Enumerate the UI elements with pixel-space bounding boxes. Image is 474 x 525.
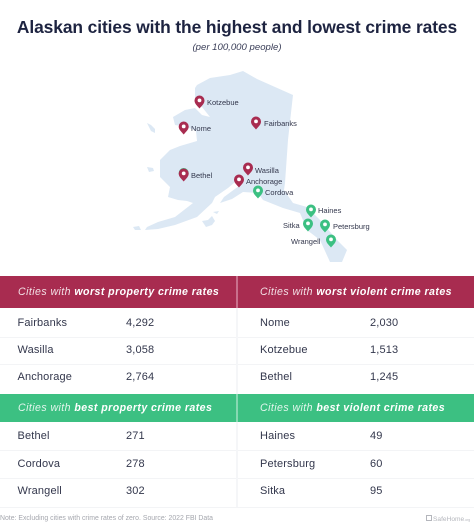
panel: worst crime rows: Nome (260, 317, 290, 329)
land (133, 71, 347, 262)
city labels (191, 98, 370, 246)
city labels: Fairbanks (264, 119, 297, 128)
panel: best crime rows: 60 (370, 458, 383, 470)
panel: best crime rows: Cordova (18, 458, 60, 470)
logo text: SafeHome.org (433, 516, 470, 523)
heading: best property: Cities with best property crime rates (18, 402, 212, 414)
city labels: Sitka (283, 221, 301, 230)
panel: best crime rows: 302 (126, 485, 145, 497)
panel: best crime rows: 278 (126, 458, 145, 470)
map of Alaska with city pins (133, 71, 370, 262)
subtitle: (per 100,000 people) (192, 42, 282, 53)
heading: best violent: Cities with best violent crime rates (260, 402, 445, 414)
panel: worst crime rows: Bethel (260, 371, 292, 383)
panel: best crime header (0, 394, 474, 422)
panel: worst crime rows (0, 308, 474, 394)
city labels: Bethel (191, 171, 213, 180)
heading: worst violent: Cities with worst violent crime rates (260, 286, 452, 298)
panel: best crime rows (0, 422, 474, 508)
city labels: Kotzebue (207, 98, 239, 107)
panel: worst crime rows: 2,030 (370, 317, 398, 329)
panel: best crime rows: Petersburg (260, 458, 315, 470)
city labels: Wrangell (291, 237, 321, 246)
panel: best crime rows: 95 (370, 485, 383, 497)
green pins (253, 186, 336, 248)
city labels: Haines (318, 206, 342, 215)
city labels: Nome (191, 124, 211, 133)
panel: best crime rows: 49 (370, 430, 383, 442)
panel: worst crime rows: Wasilla (18, 344, 54, 356)
footnote: Note: Excluding cities with crime rates of zero. Source: 2022 FBI Data (0, 515, 213, 522)
city labels: Wasilla (255, 166, 280, 175)
panel: best crime rows: Bethel (18, 430, 50, 442)
panel: worst crime rows: Anchorage (18, 371, 72, 383)
panel: best crime rows: Sitka (260, 485, 285, 497)
city labels: Cordova (265, 188, 294, 197)
panel: worst crime rows: 1,245 (370, 371, 398, 383)
panel: worst crime rows: 3,058 (126, 344, 154, 356)
panel: worst crime header (0, 276, 474, 308)
panel: worst crime rows: Fairbanks (18, 317, 67, 329)
panel: best crime rows: Wrangell (18, 485, 62, 497)
city labels: Petersburg (333, 222, 370, 231)
panel: best crime rows: Haines (260, 430, 295, 442)
city labels: Anchorage (246, 177, 282, 186)
panel: worst crime rows: 4,292 (126, 317, 154, 329)
panel: best crime rows: 271 (126, 430, 145, 442)
title: Alaskan cities with the highest and lowest crime rates (17, 17, 457, 37)
panel: worst crime rows: Kotzebue (260, 344, 308, 356)
heading: worst property: Cities with worst property crime rates (18, 286, 219, 298)
red pins (179, 96, 261, 188)
panel: worst crime rows: 2,764 (126, 371, 154, 383)
panel: worst crime rows: 1,513 (370, 344, 398, 356)
